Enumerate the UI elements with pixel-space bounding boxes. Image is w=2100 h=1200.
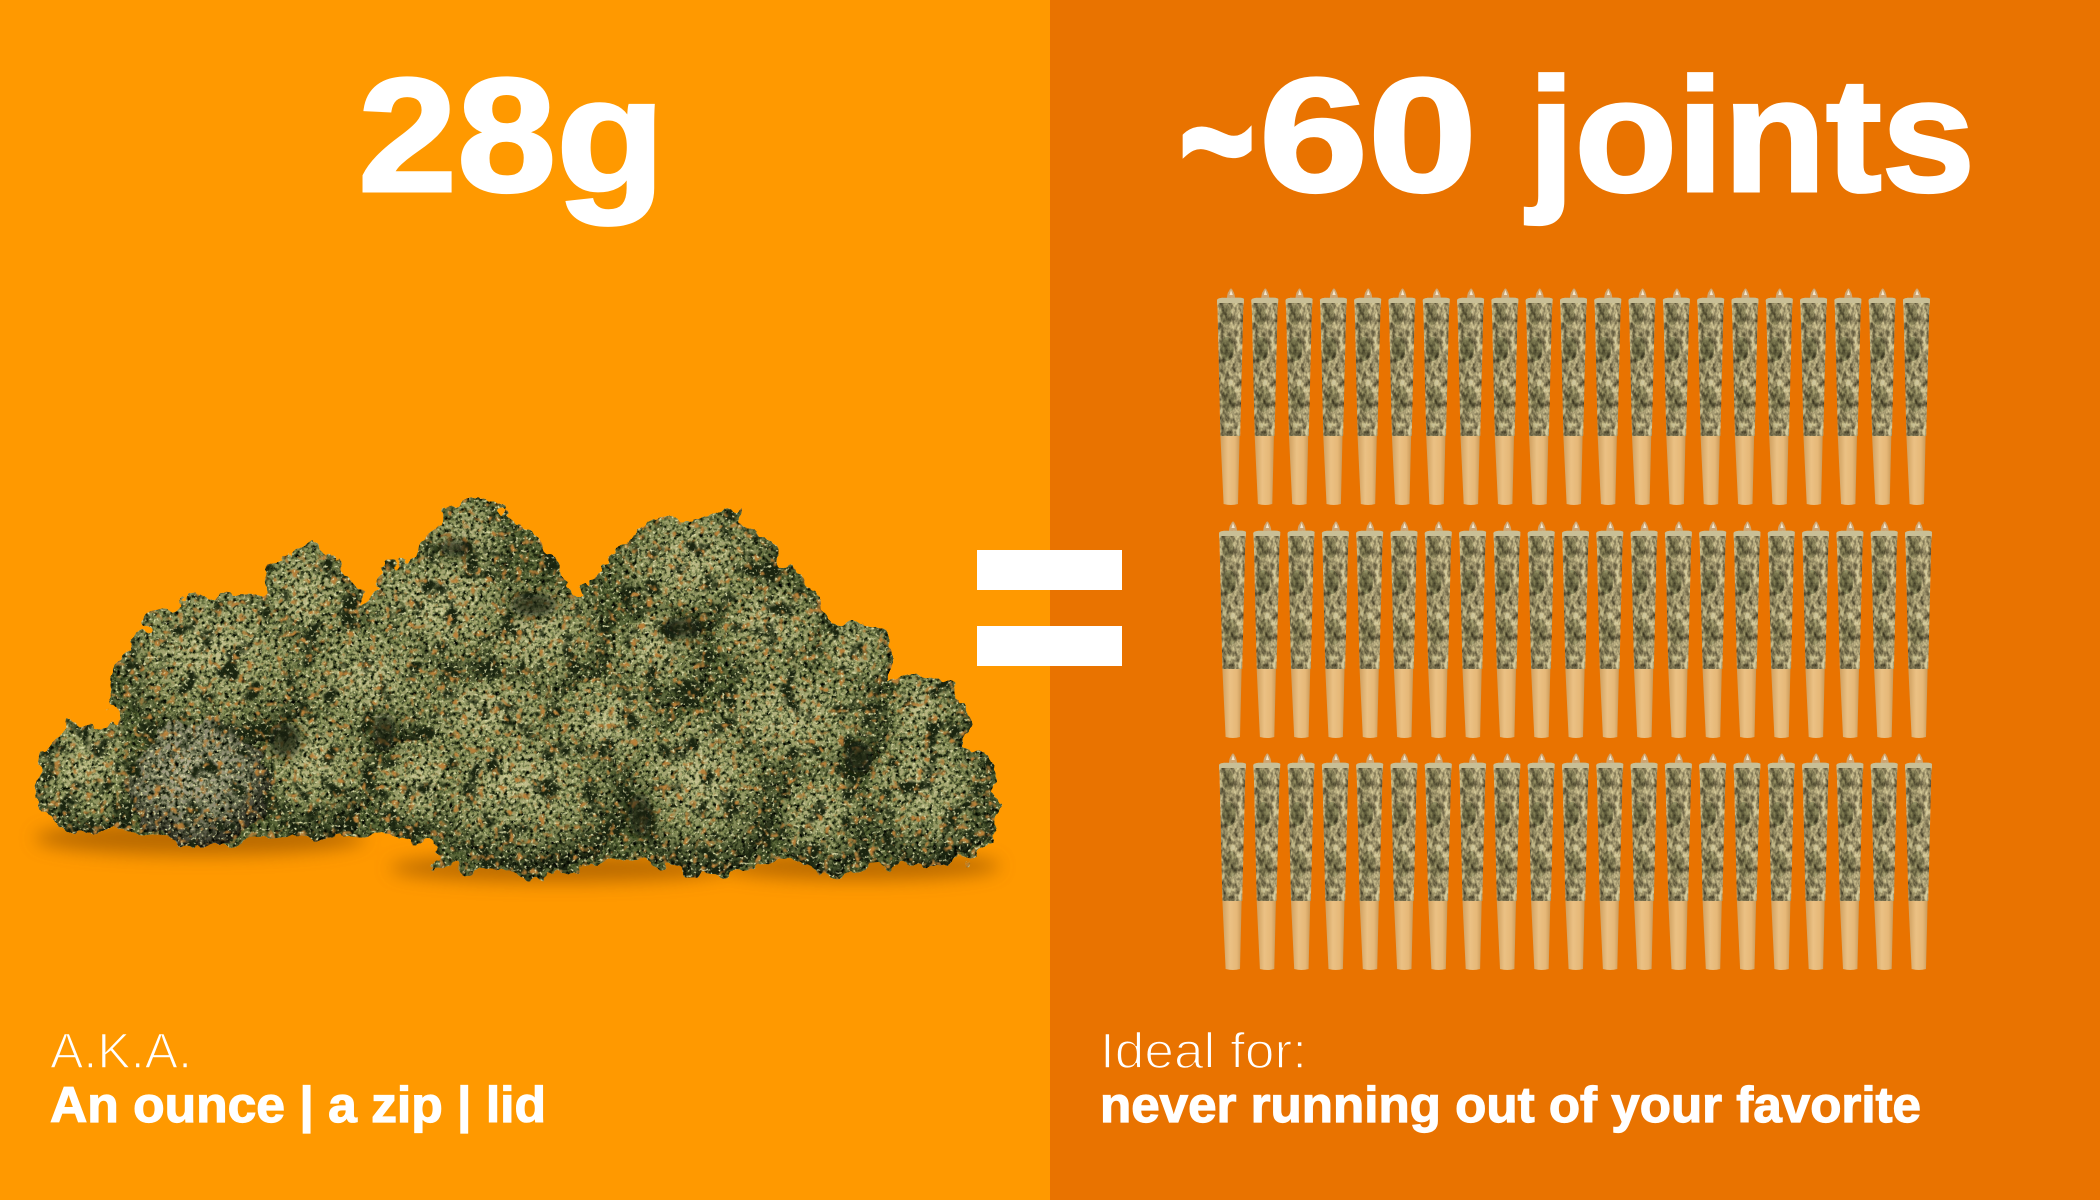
image: grid of joints: [1217, 288, 1932, 970]
heading: about 60 joints: joints: [1525, 45, 1975, 226]
names: an ounce, a zip, lid: An ounce | a zip | lid: [50, 1077, 546, 1134]
heading: about 60 joints: ~: [1180, 50, 1254, 231]
label: A.K.A.: A.K.A.: [50, 1023, 192, 1079]
label: Ideal for: Ideal for:: [1100, 1023, 1307, 1079]
text block: ideal for: [1100, 1023, 1921, 1133]
joints row 3: [1219, 754, 1932, 970]
text block: also known as: [50, 1023, 546, 1134]
pile shadow: [35, 821, 1000, 882]
use: never running out of your favorite: never running out of your favorite: [1100, 1077, 1921, 1133]
image: pile of cannabis buds: [35, 500, 1000, 882]
icon: equals sign: [977, 550, 1122, 666]
dark crevices between buds: [269, 539, 873, 837]
heading: about 60 joints: [1180, 45, 1975, 231]
heading: about 60 joints: 60: [1259, 45, 1477, 226]
joints row 1: [1217, 288, 1930, 505]
heading: 28g: 28g: [358, 45, 665, 226]
buds: [36, 500, 999, 878]
panel: left orange background: [0, 0, 1050, 1200]
joints row 2: [1219, 522, 1932, 738]
panel: right darker orange background: [1050, 0, 2100, 1200]
